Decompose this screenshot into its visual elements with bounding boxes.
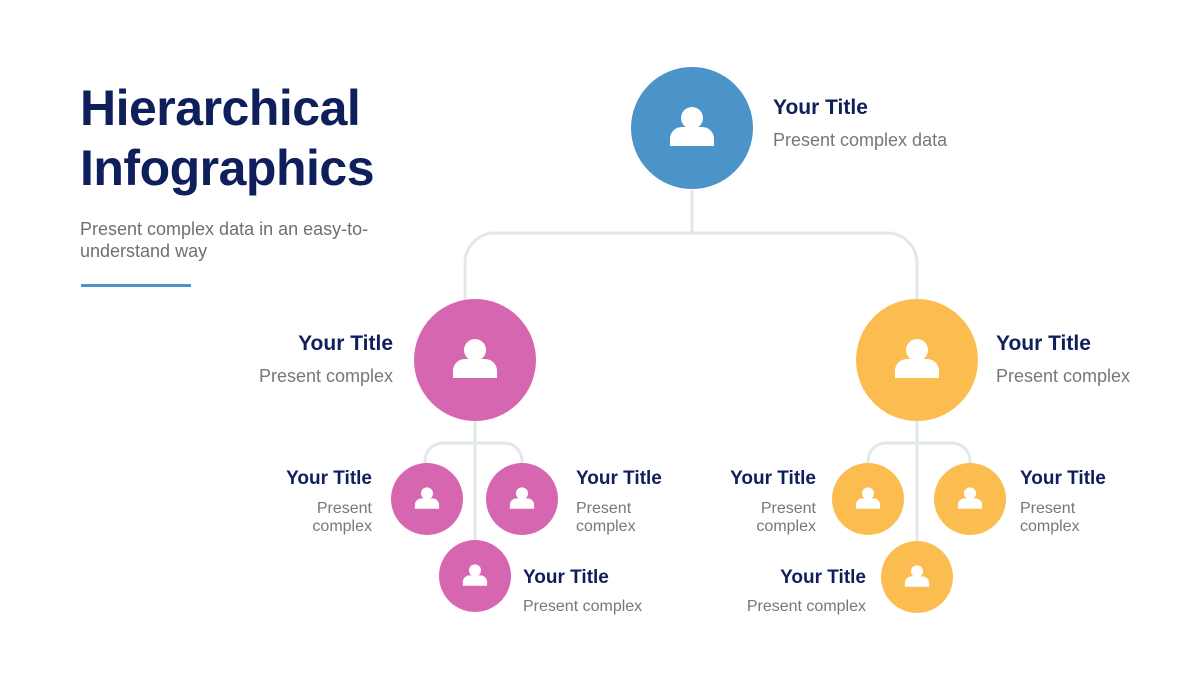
- pink small nodes: Your Title: [286, 468, 372, 489]
- node: top: Your Title: [773, 96, 868, 119]
- connectors: [425, 190, 970, 541]
- title: Infographics: [80, 140, 374, 196]
- yellow small nodes: Present: [1020, 500, 1076, 517]
- yellow small nodes: Your Title: [780, 567, 866, 588]
- node: top: [631, 67, 948, 189]
- subtitle: Present complex data in an easy-to-understand way: [80, 219, 368, 261]
- title: [80, 80, 374, 196]
- yellow small nodes: Present complex: [747, 598, 866, 615]
- node: top: Present complex data: [773, 130, 948, 150]
- pink small nodes: Your Title: [576, 468, 662, 489]
- yellow small nodes: complex: [756, 518, 816, 535]
- node: left mid: [259, 299, 536, 421]
- node: left mid: Your Title: [298, 332, 393, 355]
- node: right mid: Present complex: [996, 366, 1130, 386]
- pink small nodes: Present: [317, 500, 373, 517]
- accent line: [81, 284, 191, 287]
- pink small nodes: Present: [576, 500, 632, 517]
- yellow small nodes: Your Title: [730, 468, 816, 489]
- pink small nodes: Present complex: [523, 598, 642, 615]
- yellow small nodes: Your Title: [1020, 468, 1106, 489]
- pink small nodes: Your Title: [523, 567, 609, 588]
- node: right mid: Your Title: [996, 332, 1091, 355]
- yellow small nodes: Present: [761, 500, 817, 517]
- title: Hierarchical: [80, 80, 360, 136]
- pink small nodes: [286, 463, 662, 615]
- node: left mid: Present complex: [259, 366, 393, 386]
- pink small nodes: complex: [576, 518, 636, 535]
- yellow small nodes: complex: [1020, 518, 1080, 535]
- node: right mid: [856, 299, 1130, 421]
- yellow small nodes: [730, 463, 1106, 615]
- pink small nodes: complex: [312, 518, 372, 535]
